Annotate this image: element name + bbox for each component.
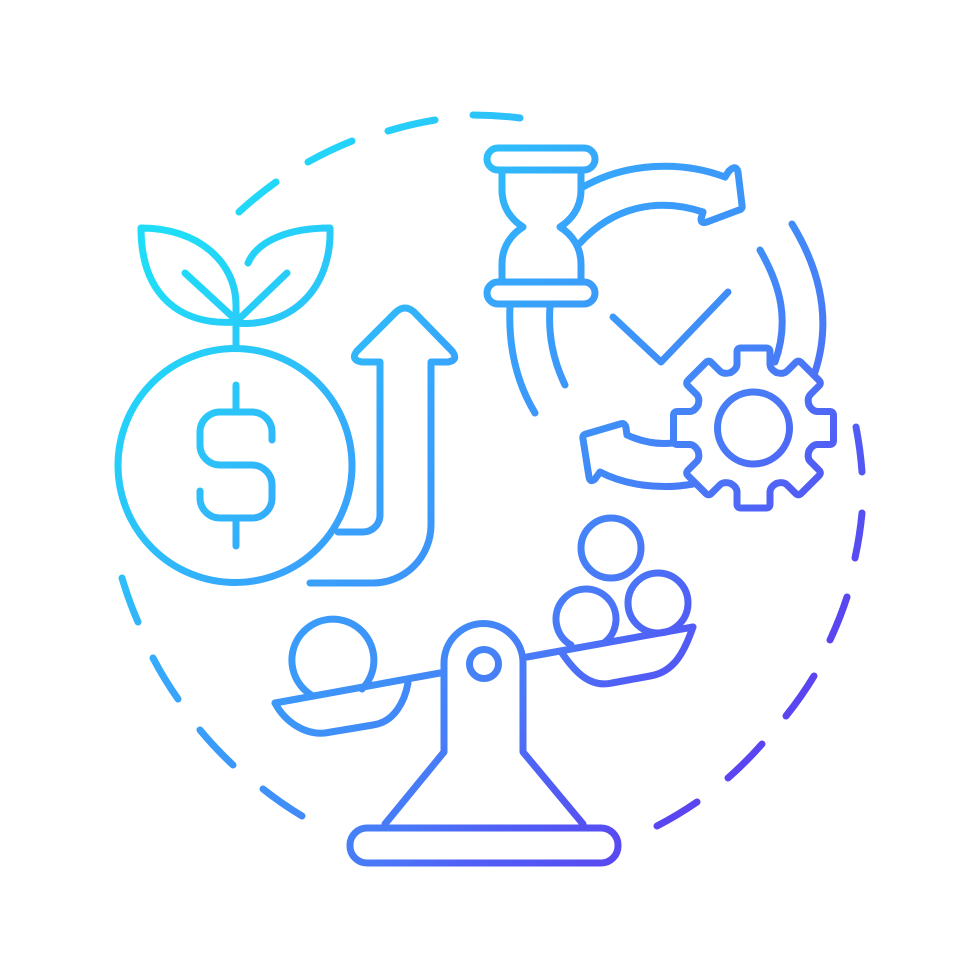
gear teeth <box>670 344 837 512</box>
infographic icon <box>114 112 866 866</box>
icon: gear <box>670 344 837 512</box>
icon: dollar coin <box>118 348 352 582</box>
left ball <box>292 619 374 696</box>
icon: hourglass <box>487 148 595 413</box>
icon: plant leaves <box>141 228 330 346</box>
gear hub <box>718 392 790 464</box>
arrow: growth up <box>310 308 455 583</box>
scale beam <box>275 627 693 703</box>
curved motion lines <box>760 224 823 372</box>
base <box>350 828 618 863</box>
icon: balance scale <box>275 518 693 863</box>
arrow: gear to left <box>583 424 693 487</box>
icon: check mark <box>613 292 728 362</box>
right left ball <box>556 589 616 645</box>
dashed circle ring <box>122 115 862 826</box>
right right ball <box>628 573 688 633</box>
left pan <box>275 683 408 733</box>
arrow: hourglass to right <box>580 166 742 243</box>
pivot <box>470 650 498 678</box>
right pan <box>562 627 693 684</box>
main artwork <box>118 115 862 863</box>
right top ball <box>581 518 641 578</box>
fulcrum <box>385 624 583 824</box>
